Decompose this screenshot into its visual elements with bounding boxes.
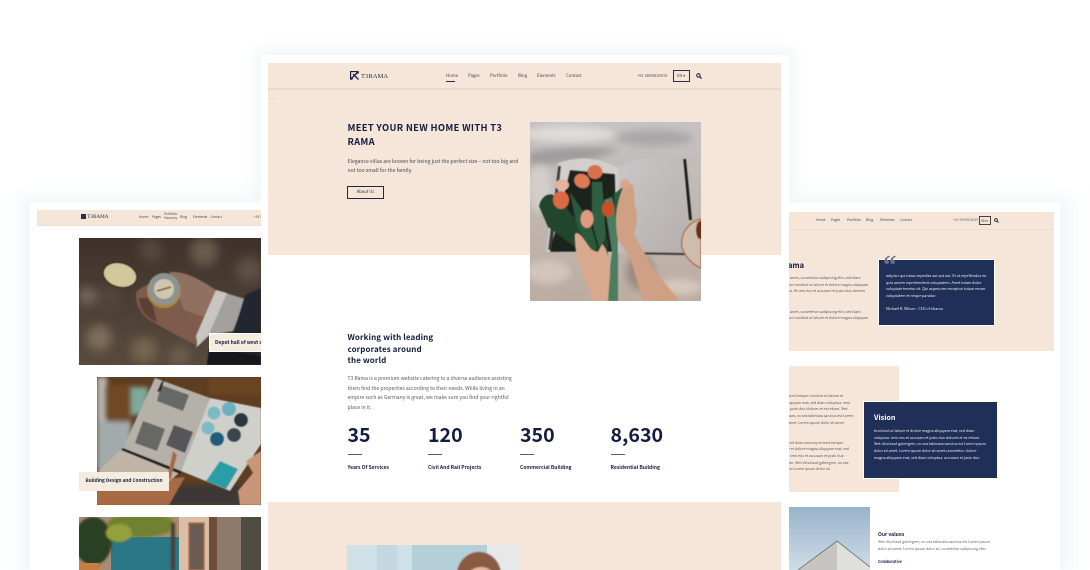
stat number: 35 [348, 419, 371, 448]
panel: right page preview [785, 203, 1060, 570]
label: Building Design and Construction [79, 472, 169, 491]
right nav: Contact: Contact [900, 217, 912, 222]
lower peach band [268, 502, 781, 570]
mission text: liquyam erat, sed diam voluptua. vero [788, 401, 850, 406]
right search icon [994, 218, 999, 223]
phone number: +91 9898818919 [637, 73, 667, 79]
vision text: dolor sit amet. Lorem ipsum dolor sit amet consetetur. dolore [874, 449, 976, 454]
stat rule [520, 454, 534, 455]
stat: commercial building [520, 419, 572, 471]
collaborative label: Collaborative [878, 560, 902, 565]
about heading: the world [348, 355, 386, 366]
small mark [268, 98, 276, 100]
stat number: 350 [520, 419, 555, 448]
quote mark: “ [883, 250, 896, 280]
mission text: t justo duo dolores et ea rebum. Stet [788, 407, 848, 412]
label: Depot hall: Depot hall of west s [215, 339, 262, 346]
testimonial text: voluptatem et neque pariatur. [886, 294, 936, 299]
mission text: sed diam nonumy eirmod tempor [788, 441, 843, 446]
left nav: Contact: Contact [210, 214, 222, 219]
photo: street with trees [79, 517, 261, 570]
mission text: amet. Lorem ipsum dolor sit amet. [788, 421, 845, 426]
right nav: Portfolio: Portfolio [847, 217, 861, 222]
left logo: T3RAMA [87, 214, 109, 220]
logo mark [350, 71, 359, 80]
right language select: EN ▾ [982, 218, 988, 223]
photo: woman portrait [347, 545, 519, 570]
mission text: yam, no sea takimata sanctus est Lorem [788, 414, 854, 419]
testimonial text: adipisci qui natus expedita aut aut aut. Et ut repellendus ea [886, 274, 986, 279]
nav link: Pages: Pages [468, 73, 480, 79]
stat: residential building [610, 419, 663, 471]
testimonial text: quis autem reprehenderit voluptatem. Amet totam dolor [886, 281, 981, 286]
our values heading: Our values [878, 531, 904, 538]
left nav: Portfolio: Portfolio [164, 211, 177, 216]
mission text: e et dolore magna aliquyam erat, sed [788, 447, 849, 452]
about us button [347, 186, 384, 198]
left nav: Blog: Blog [180, 214, 187, 219]
logo text: T3RAMA [361, 72, 388, 80]
photo: open brochure [97, 377, 261, 505]
our values text: dolor sit amet. Lorem ipsum dolor sit, consetetur sadipscing elitr. [878, 547, 986, 552]
vision text: voluptua. vero eos et accusam et justo duo dolores et ea rebum. [874, 436, 980, 441]
hero paragraph [348, 158, 518, 174]
nav link: Portfolio: Portfolio [490, 73, 507, 79]
panel: left page preview [30, 203, 265, 570]
vision text: magna aliquyam erat, sed diam voluptua. accusam et justo duo [874, 456, 979, 461]
right intro text: t amet, consetetur sadipscing elitr, sed diam [788, 276, 861, 281]
hero paragraph: not too small for the family. [348, 167, 412, 174]
mission text: mod tempor invidunt ut labore et [788, 394, 843, 399]
right nav line [788, 229, 1054, 230]
hero heading: MEET YOUR NEW HOME WITH T3 [348, 120, 502, 134]
stat: civil and rail projects [428, 419, 482, 471]
nav link: Elements: Elements [537, 73, 556, 79]
photo: tulips on open book [530, 122, 701, 301]
stat: years of services [348, 419, 389, 471]
mission text: t vero eos et accusam et justo duo [788, 454, 844, 459]
left nav: Elements: Elements [193, 214, 207, 219]
left nav: Portfolio: Masonry [164, 215, 177, 220]
photo: building against sky [789, 507, 870, 570]
left nav: Pages: Pages [152, 214, 161, 219]
about heading [348, 332, 433, 366]
panel: center page preview [261, 55, 789, 570]
hero heading: RAMA [348, 134, 375, 148]
about paragraph: empire such as Germany is great, we make sure you find your rightful [348, 394, 509, 401]
hero band [268, 63, 781, 255]
label: Depot hall [209, 333, 269, 352]
left nav: Portfolio [164, 211, 178, 220]
right nav: Blog: Blog [866, 217, 873, 222]
vision text: Stet clita kasd gubergren, no sea takimata sanctus est Lorem ipsum [874, 442, 986, 447]
left nav: Home: Home [139, 214, 148, 219]
nav active underline [446, 81, 455, 82]
stat rule [348, 454, 362, 455]
left nav bar [37, 210, 265, 226]
logo [350, 71, 388, 80]
stat rule [428, 454, 442, 455]
language select [673, 70, 690, 82]
right intro text: por invidunt ut labore et dolore magna aliquyam [788, 283, 868, 288]
nav link: Blog: Blog [518, 73, 527, 79]
stat label: Commercial Building [520, 464, 572, 471]
right nav: Home: Home [816, 217, 826, 222]
mission text [788, 394, 854, 472]
search icon [696, 73, 702, 79]
stat number: 120 [428, 419, 463, 448]
right nav: Elements: Elements [880, 217, 895, 222]
about paragraph [348, 375, 512, 411]
mission text: um. Stet clita kasd gubergren, no sea [788, 461, 849, 466]
stat rule [610, 454, 624, 455]
right language select [979, 216, 991, 225]
mission text: est Lorem ipsum dolor sit. [788, 467, 831, 472]
stat label: Years Of Services [348, 464, 389, 471]
about heading: Working with leading [348, 332, 433, 343]
about heading: corporates around [348, 344, 422, 354]
photo: compass in hand [79, 238, 261, 365]
right phone: +91 9999818919 [953, 217, 978, 222]
label: Building Design and Construction: Building Design and Construction [86, 478, 162, 484]
right heading fragment: ama [788, 260, 804, 271]
right intro text [788, 276, 868, 321]
right nav: Pages: Pages [831, 217, 840, 222]
testimonial author: Michael B. Wilson - CEO of t3rama [886, 307, 943, 312]
stat number: 8,630 [610, 419, 663, 448]
vision text [874, 429, 986, 461]
right intro text: por invidunt ut labore et dolore magna aliquyam [788, 316, 868, 321]
our values text: Stet clita kasd gubergren, no sea takimata sanctus est Lorem ipsum [878, 540, 990, 545]
vision heading: Vision [874, 413, 895, 423]
stat label: Residential Building [610, 464, 660, 471]
hero paragraph: Elegance villas are known for being just the perfect size – not too big and [348, 158, 518, 164]
nav link: Contact: Contact [566, 73, 582, 79]
vision text: tincidunt ut labore et dolore magna aliquyam erat, sed diam [874, 429, 974, 434]
testimonial card [878, 259, 995, 326]
our values text [878, 540, 990, 552]
right intro text: ua. At vero eos et accusam et justo duo dolores [788, 289, 865, 294]
right intro text: t amet, consetetur sadipscing elitr, sed diam [788, 310, 861, 315]
hero heading [348, 120, 502, 148]
stat label: Civil And Rail Projects [428, 464, 481, 471]
about paragraph: place in it. [348, 404, 372, 411]
testimonial text: voluptate tenetur sit. Qui asperiores excepturi totam rerum [886, 287, 985, 292]
vision card [863, 401, 998, 479]
peach mission panel [788, 366, 899, 492]
right hero band [788, 212, 1054, 351]
about paragraph: them find the properties according to their needs. While living in an [348, 385, 505, 392]
about paragraph: T3 Rama is a premium website catering to a diverse audience assisting [348, 375, 512, 382]
testimonial text [886, 274, 986, 299]
language select: EN ▾ [677, 73, 685, 79]
nav link: Home: Home [446, 73, 458, 79]
nav divider [268, 88, 781, 90]
about us button: About Us [357, 189, 374, 195]
